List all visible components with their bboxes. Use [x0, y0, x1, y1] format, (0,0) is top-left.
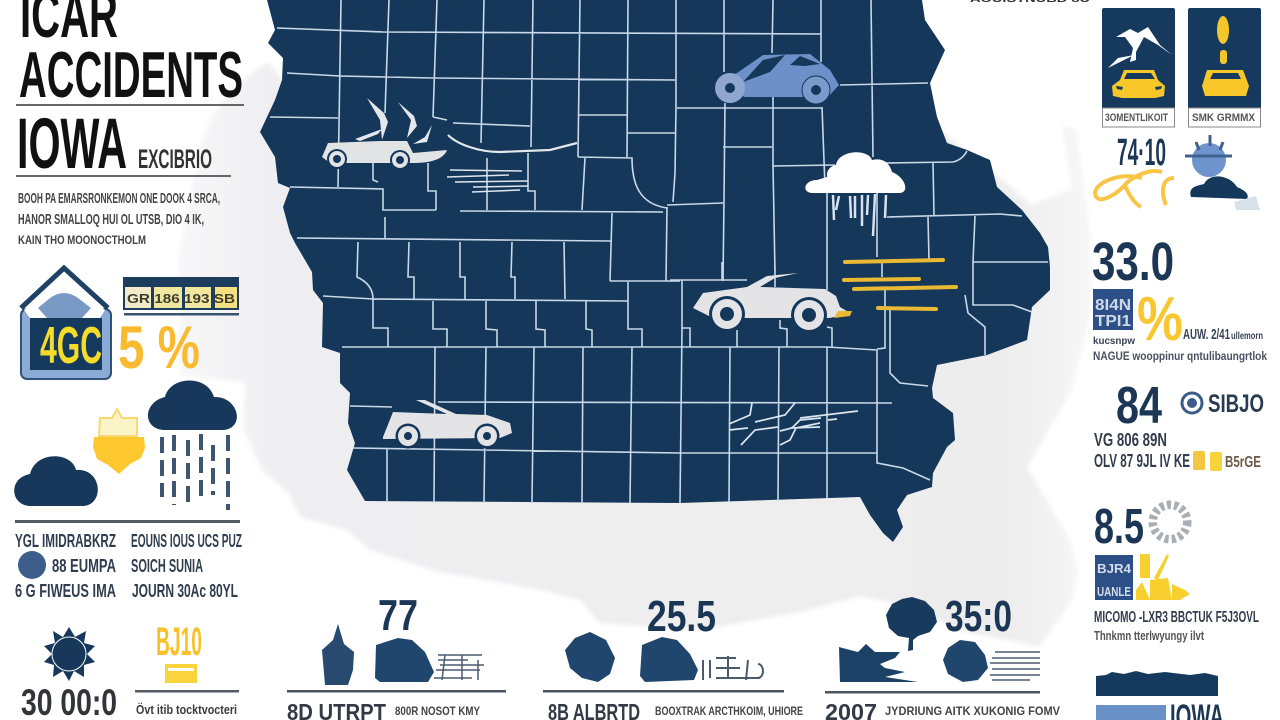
block: blue label and percent [1093, 285, 1267, 363]
left two-column text: 6 G FIWEUS IMA [15, 581, 116, 601]
Iowa county map [260, 0, 1050, 542]
intro text [18, 190, 220, 247]
divider [15, 520, 240, 523]
warning panel: exclamation: SMK GRMMX [1192, 112, 1256, 124]
left two-column text: EOUNS IOUS UCS PUZ [131, 531, 242, 551]
bottom stat 77: 77 [378, 591, 418, 640]
block: blue label and percent: 8I4N [1095, 297, 1131, 314]
icon: dark rain cloud [148, 380, 237, 510]
large white car [693, 273, 852, 333]
icon: yellow sun [93, 409, 145, 474]
icon: dark sun [44, 627, 95, 681]
block: blue label and yellow value: BJR4 [1097, 561, 1132, 576]
block: blue label and yellow value [1094, 554, 1259, 643]
bottom stat 25.5: 25.5 [647, 592, 716, 641]
caption right of sun: Övt itib tocktvocteri [136, 702, 237, 717]
icon: dark cloud [14, 456, 98, 506]
block: blue label and percent: TPI1 [1095, 313, 1131, 330]
intro text: HANOR SMALLOQ HUI OL UTSB, DIO 4 IK, [18, 211, 204, 228]
road crack lines [729, 403, 858, 445]
text: BJ10 [156, 620, 202, 664]
block text under 84: OLV 87 9JL IV KE [1094, 451, 1190, 471]
house badge with statistic [21, 268, 111, 379]
statistic 84 with seal [1116, 377, 1264, 435]
block text under 84: VG 806 89N [1094, 430, 1167, 450]
left two-column text: 88 EUMPA [52, 556, 116, 576]
icon: globe [18, 551, 46, 579]
white rain cloud [805, 152, 905, 236]
block: blue label and percent: % [1137, 285, 1183, 354]
block: blue label and yellow value: UANLE [1097, 584, 1131, 599]
title: ACCIDENTS [19, 38, 243, 111]
block text under 84: B5rGE [1225, 454, 1261, 471]
block: blue label and percent: ullemorn [1231, 331, 1263, 342]
skyline strip [1096, 671, 1218, 696]
warning panel: crash and smoke [1102, 8, 1175, 127]
bottom stat 35:0: 35:0 [945, 592, 1012, 641]
statistic 8.5: 8.5 [1094, 500, 1144, 554]
left two-column text: JOURN 30Ac 80YL [132, 581, 238, 601]
left two-column text: SOICH SUNIA [131, 556, 203, 576]
south-west convertible [383, 400, 512, 448]
orange percent: 5 % [118, 314, 200, 381]
statistic 33.0: 33.0 [1092, 232, 1174, 292]
icon: grey sun [1153, 505, 1187, 539]
Iowa footer badge [1096, 698, 1224, 720]
title [16, 0, 244, 184]
block text under 84 [1094, 430, 1261, 471]
bottom stat 77: 800R NOSOT KMY [395, 704, 480, 718]
warning panel: crash and smoke: 3OMENTLIKOIT [1105, 112, 1168, 124]
statistic 84 with seal: 84 [1116, 377, 1162, 435]
legend strip [123, 277, 239, 316]
icon: yellow curves [1095, 171, 1174, 207]
statistic 74.10: 74·10 [1117, 132, 1166, 174]
intro text: KAIN THO MOONOCTHOLM [18, 233, 146, 247]
bottom stat 35:0 [825, 592, 1060, 720]
bottom stat 77 [287, 591, 506, 720]
grey background silhouette [178, 62, 1092, 647]
intro text: BOOH PA EMARSRONKEMON ONE DOOK 4 SRCA, [18, 190, 220, 207]
title: IOWA [17, 105, 127, 184]
bottom stat 25.5 [543, 592, 803, 720]
legend strip: GR 186 193 SB [127, 291, 235, 306]
warning panel: exclamation [1188, 8, 1261, 127]
caption right of sun [135, 690, 239, 717]
yellow motion lines [844, 260, 956, 309]
block: blue label and yellow value: Thnkmn tterlwyungy ilvt [1094, 628, 1204, 643]
bottom stat 35:0: JYDRIUNG AITK XUKONIG FOMV [885, 704, 1060, 718]
icon: weather with blue sun [1185, 135, 1260, 210]
car with smoke fins: north-west [322, 98, 577, 192]
title: EXCIBRIO [138, 144, 212, 174]
yellow value block [156, 620, 202, 683]
bottom stat 25.5: BOOXTRAK ARCTHKOIM, UHIORE [655, 704, 803, 718]
house badge with statistic: 4GC [40, 317, 102, 375]
left two-column text [15, 531, 242, 601]
block: blue label and percent: AUW. 2/41 [1183, 326, 1230, 343]
blue car [715, 54, 839, 104]
block: blue label and percent: kucsnpw [1093, 336, 1135, 347]
left two-column text: YGL IMIDRABKRZ [15, 531, 116, 551]
